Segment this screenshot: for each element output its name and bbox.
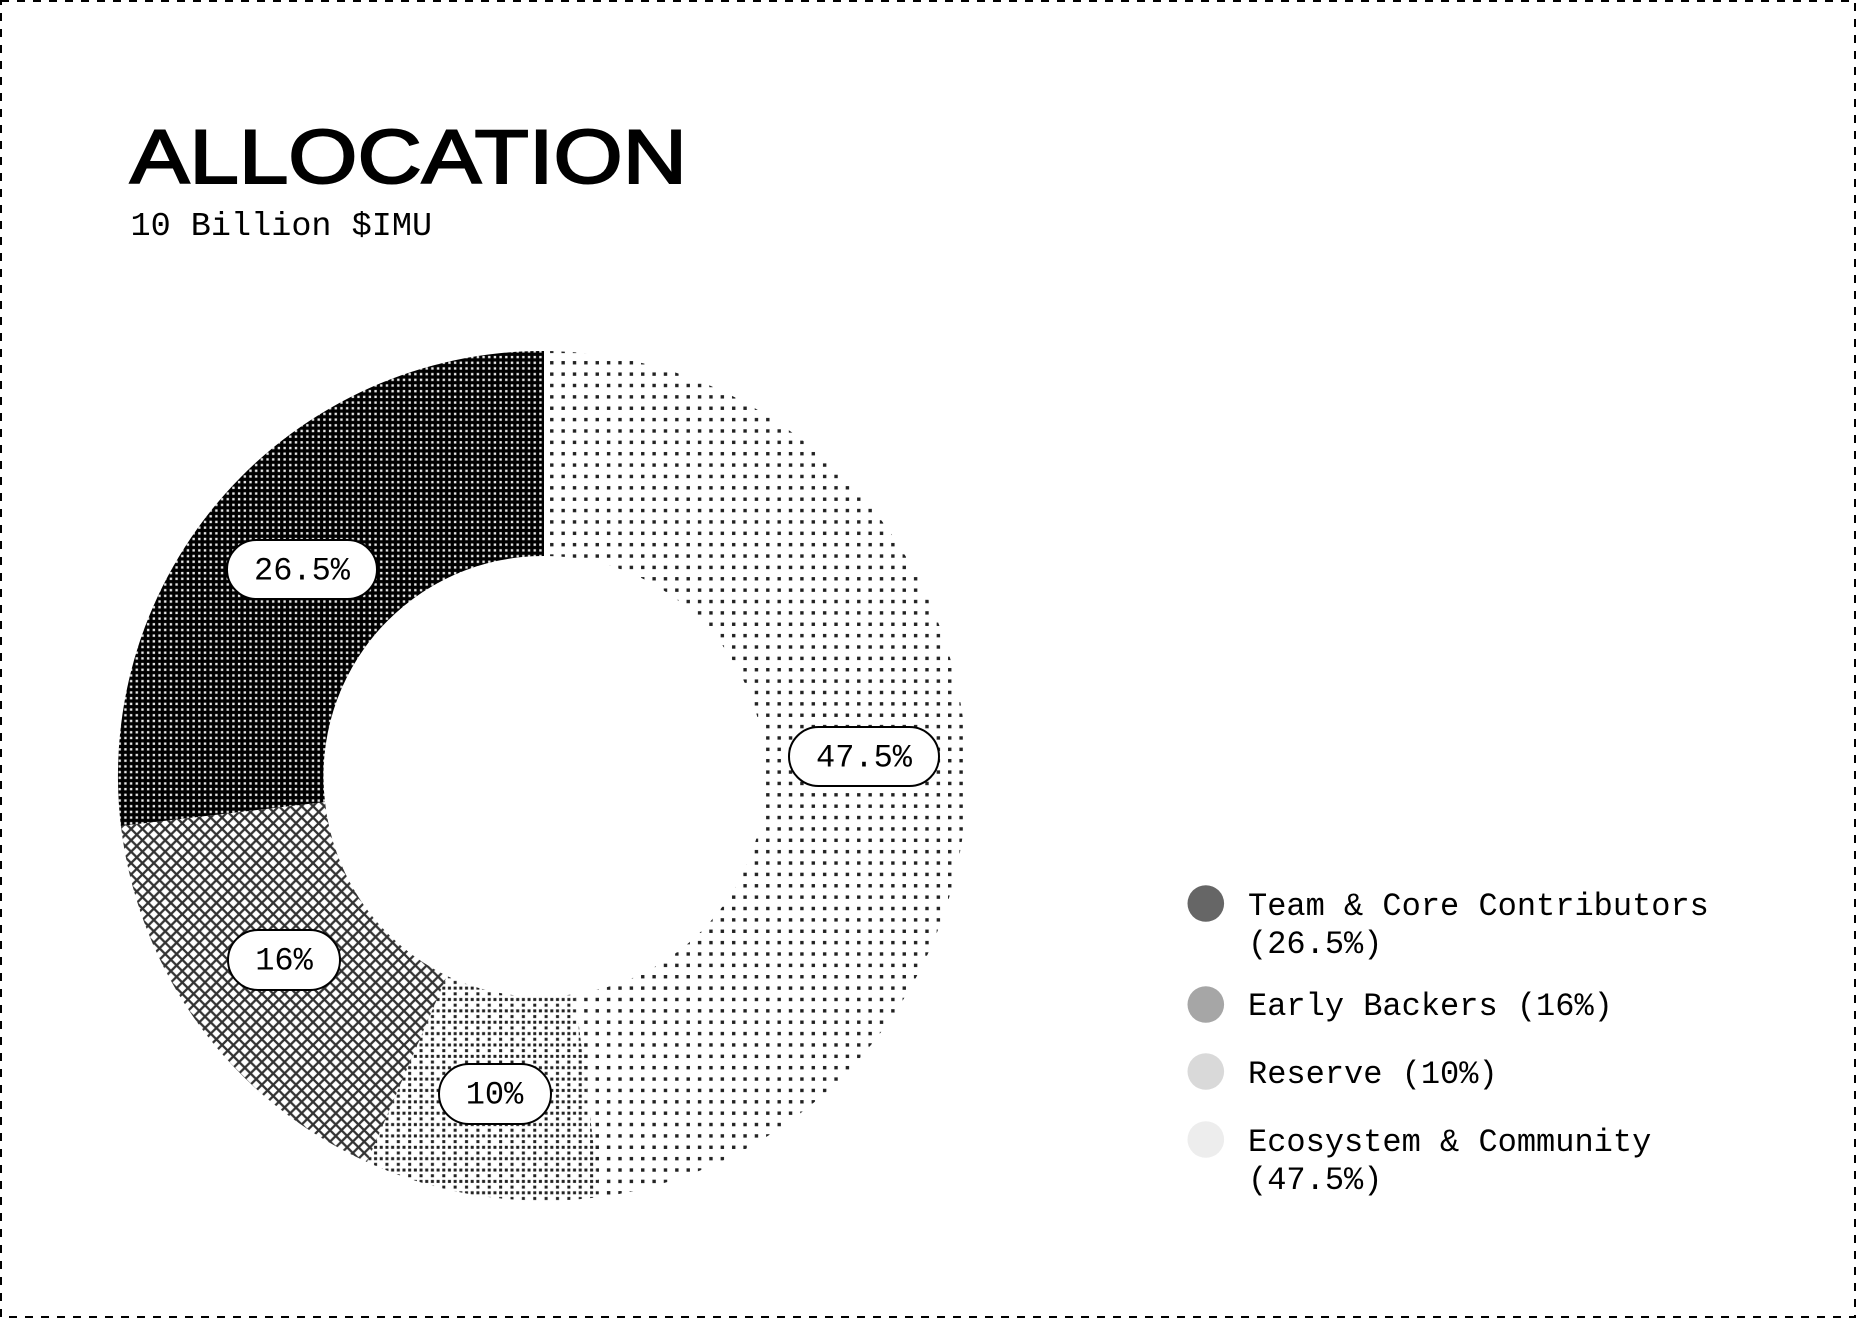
segment: Early Backers 16%: [121, 802, 447, 1162]
label pill: 26.5%: [227, 540, 377, 599]
label pill: 26.5%: 26.5%: [254, 552, 351, 590]
legend item: Reserve: Reserve (10%): [1248, 1056, 1498, 1093]
legend item: Ecosystem & Community: Ecosystem & Community: [1248, 1124, 1651, 1161]
title: ALLOCATION: [130, 115, 687, 200]
label pill: 10%: [439, 1064, 551, 1124]
legend item: Ecosystem & Community: [1188, 1121, 1651, 1199]
legend item: Ecosystem & Community: (47.5%): [1248, 1162, 1382, 1199]
segment: Team & Core Contributors 26.5%: [118, 351, 544, 826]
legend item: Team & Core Contributors: Team & Core Contributors: [1248, 888, 1709, 925]
segment: Reserve 10%: [367, 976, 600, 1201]
legend item: Team & Core Contributors: (26.5%): [1248, 926, 1382, 963]
segment: Ecosystem & Community 47.5%: [544, 351, 967, 1197]
legend item: Early Backers: Early Backers (16%): [1248, 988, 1613, 1025]
label pill: 16%: [228, 930, 340, 990]
label pill: 16%: 16%: [255, 942, 314, 980]
subtitle: 10 Billion $IMU: [130, 208, 432, 246]
label pill: 47.5%: 47.5%: [816, 740, 913, 776]
label pill: 10%: 10%: [466, 1076, 524, 1114]
donut chart: [118, 351, 967, 1201]
legend item: Team & Core Contributors: [1188, 885, 1709, 963]
label pill: 47.5%: [789, 727, 939, 786]
legend: [1188, 885, 1709, 1199]
